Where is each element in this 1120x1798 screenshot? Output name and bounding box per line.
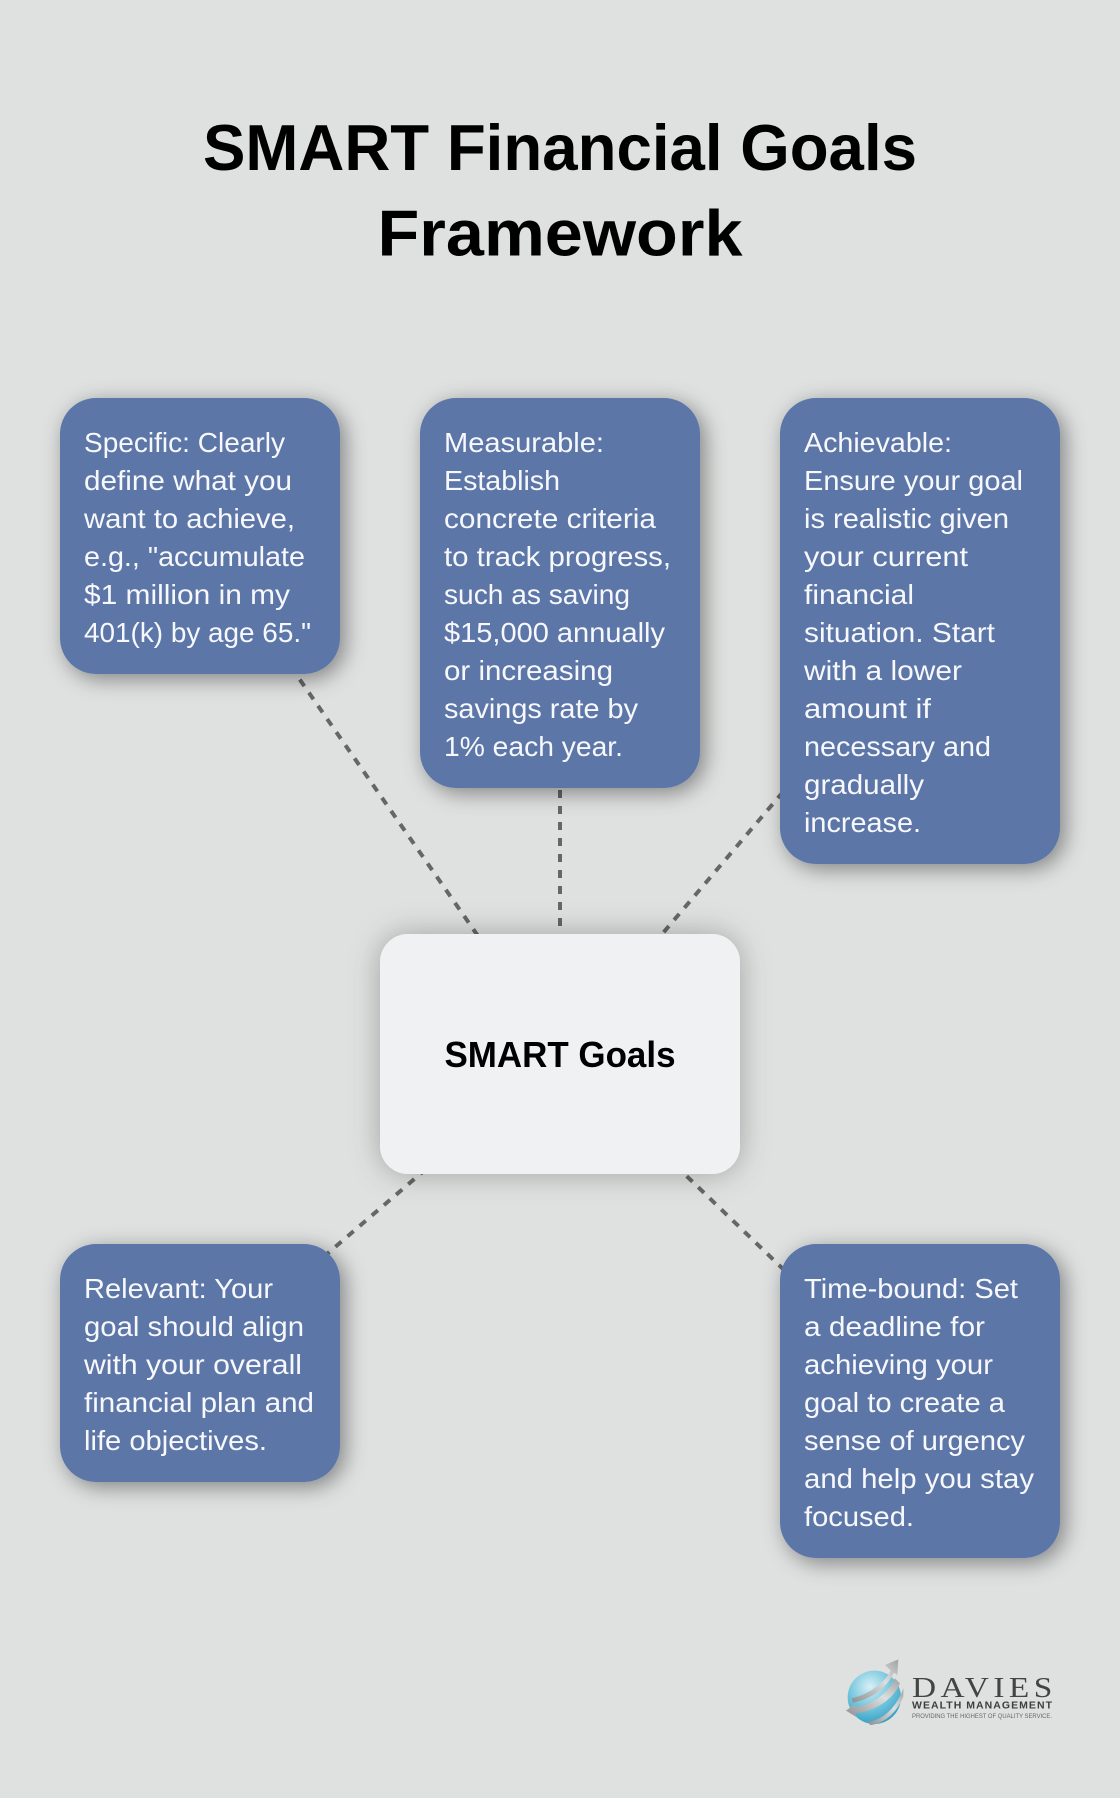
panel: time-bound: achieving your — [804, 1349, 993, 1380]
panel: relevant: goal should align — [84, 1311, 304, 1342]
panel: specific: $1 million in my — [84, 579, 290, 610]
panel: specific — [60, 398, 340, 674]
panel: time-bound: a deadline for — [804, 1311, 985, 1342]
panel: specific: define what you — [84, 465, 292, 496]
panel: relevant: with your overall — [83, 1349, 302, 1380]
panel: relevant — [60, 1244, 340, 1482]
panel: measurable: concrete criteria — [444, 503, 657, 534]
panel: time-bound: sense of urgency — [804, 1425, 1025, 1456]
panel: center SMART Goals — [380, 934, 740, 1174]
panel: center SMART Goals: SMART Goals — [444, 1034, 676, 1075]
panel: achievable — [780, 398, 1060, 864]
panel: measurable: 1% each year. — [444, 731, 623, 762]
panel: time-bound: goal to create a — [804, 1387, 1006, 1418]
panel: achievable: amount if — [804, 693, 931, 724]
panel: measurable: savings rate by — [444, 693, 638, 724]
icon: globe with arrows — [846, 1659, 903, 1725]
panel: time-bound: and help you stay — [804, 1463, 1034, 1494]
panel: achievable: your current — [804, 541, 968, 572]
logo: Davies Wealth Management: WEALTH MANAGEMENT — [912, 1700, 1053, 1712]
panel: specific: e.g., "accumulate — [84, 541, 305, 572]
dashed connectors — [200, 536, 920, 1401]
panel: achievable: Ensure your goal — [804, 465, 1023, 496]
title: SMART Financial Goals — [203, 111, 917, 184]
title: Framework — [378, 196, 743, 270]
panel: achievable: situation. Start — [804, 617, 995, 648]
panel: measurable: such as saving — [444, 579, 630, 610]
panel: measurable: to track progress, — [444, 541, 671, 572]
panel: specific: 401(k) by age 65." — [84, 617, 311, 648]
panel: relevant: financial plan and — [84, 1387, 314, 1418]
panel: specific: Specific: Clearly — [84, 427, 285, 458]
panel: measurable: or increasing — [444, 655, 613, 686]
panel: achievable: financial — [804, 579, 914, 610]
panel: time-bound: Time-bound: Set — [804, 1273, 1018, 1304]
panel: specific: want to achieve, — [83, 503, 295, 534]
title — [203, 111, 917, 270]
logo: Davies Wealth Management: DAVIES — [912, 1671, 1052, 1703]
panel: achievable: necessary and — [804, 731, 991, 762]
panel: time-bound — [780, 1244, 1060, 1558]
panel: achievable: gradually — [804, 769, 924, 800]
panel: relevant: life objectives. — [84, 1425, 267, 1456]
panel: achievable: with a lower — [803, 655, 962, 686]
panel: measurable: $15,000 annually — [444, 617, 665, 648]
panel: achievable: is realistic given — [804, 503, 1009, 534]
panel: measurable: Measurable: — [444, 427, 604, 458]
panel: measurable — [420, 398, 700, 788]
panel: achievable: Achievable: — [804, 427, 952, 458]
panel: time-bound: focused. — [804, 1501, 914, 1532]
panel: achievable: increase. — [804, 807, 921, 838]
panel: relevant: Relevant: Your — [84, 1273, 273, 1304]
panel: measurable: Establish — [444, 465, 560, 496]
logo: Davies Wealth Management — [846, 1659, 1053, 1725]
logo: Davies Wealth Management: PROVIDING THE HIGHEST OF QUALITY SERVICE. — [912, 1713, 1052, 1720]
